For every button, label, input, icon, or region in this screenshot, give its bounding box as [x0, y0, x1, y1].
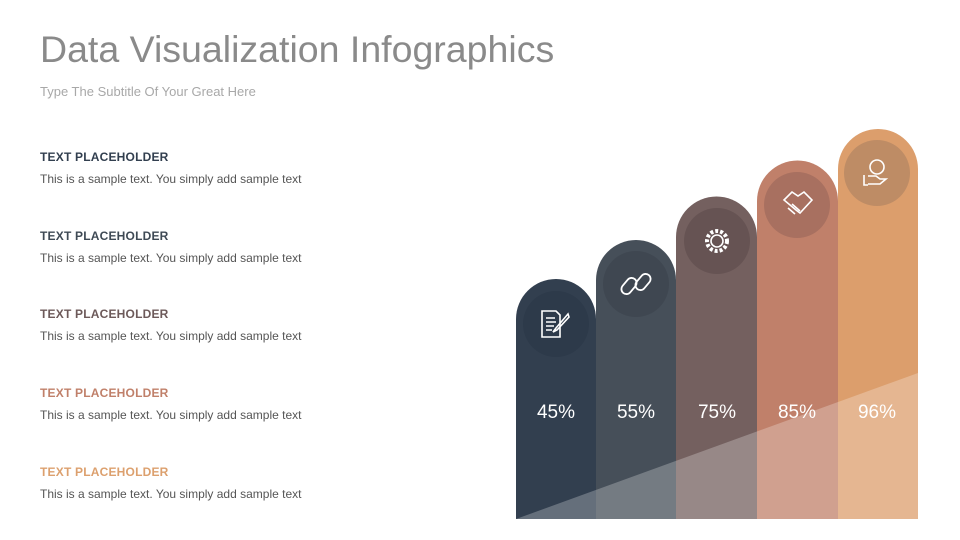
bar 2: [596, 240, 676, 519]
subtitle: Type The Subtitle Of Your Great Here: [40, 84, 256, 99]
bar 1: [516, 279, 596, 519]
bar 5: 96%: [858, 402, 896, 423]
bar 3: [676, 196, 757, 519]
text block 1: This is a sample text. You simply add sample text: [40, 172, 301, 186]
bar 4: 85%: [778, 402, 816, 423]
bar 2: 55%: [617, 402, 655, 423]
bar 1: 45%: [537, 402, 575, 423]
text block 3: TEXT PLACEHOLDER: [40, 307, 169, 321]
icon: gear: [707, 231, 727, 251]
text block 3: This is a sample text. You simply add sample text: [40, 329, 301, 343]
text block 5: This is a sample text. You simply add sample text: [40, 487, 301, 501]
text block 2: This is a sample text. You simply add sample text: [40, 251, 301, 265]
title: Data Visualization Infographics: [40, 28, 554, 70]
icon: handshake: [784, 192, 812, 214]
text block 4: TEXT PLACEHOLDER: [40, 386, 169, 400]
icon: money hand: [864, 160, 886, 185]
text block 2: [40, 229, 302, 265]
bar 5: [838, 129, 918, 519]
text block 1: [40, 150, 302, 186]
icon: link: [619, 272, 653, 296]
text block 4: [40, 386, 302, 422]
bar 4: [757, 160, 838, 519]
text block 2: TEXT PLACEHOLDER: [40, 229, 169, 243]
text block 5: TEXT PLACEHOLDER: [40, 465, 169, 479]
bar 3: 75%: [698, 402, 736, 423]
text block 1: TEXT PLACEHOLDER: [40, 150, 169, 164]
icon: document pen: [542, 311, 569, 337]
text block 3: [40, 307, 302, 343]
text block 5: [40, 465, 302, 501]
text block 4: This is a sample text. You simply add sample text: [40, 408, 301, 422]
translucent triangle overlay: [516, 373, 918, 519]
